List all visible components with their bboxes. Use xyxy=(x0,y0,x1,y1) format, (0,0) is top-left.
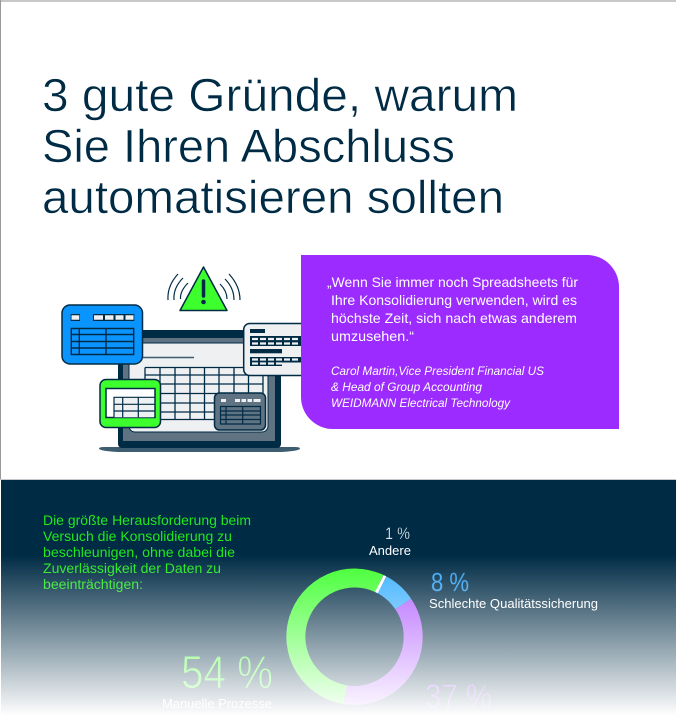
title: 3 gute Gründe, warum xyxy=(42,69,518,121)
panel: quote xyxy=(301,255,619,429)
illustration: laptop with spreadsheets and warning xyxy=(62,267,314,452)
survey question xyxy=(43,513,251,592)
title: Sie Ihren Abschluss xyxy=(42,120,455,172)
quote attribution: Carol Martin,Vice President Financial US xyxy=(331,364,544,378)
laptop screen xyxy=(123,338,275,441)
card: green table xyxy=(100,380,160,428)
survey question: beschleunigen, ohne dabei die xyxy=(43,545,235,560)
survey question: Die größte Herausforderung beim xyxy=(43,513,251,528)
title xyxy=(42,69,518,223)
label: other 1%: 1 % xyxy=(385,524,410,543)
label: poor quality assurance 8% xyxy=(429,567,598,611)
survey question: beeinträchtigen: xyxy=(43,577,143,592)
card: light table xyxy=(244,324,314,376)
icon: warning triangle xyxy=(168,267,240,310)
laptop body xyxy=(118,330,281,448)
quote text: „Wenn Sie immer noch Spreadsheets für xyxy=(327,274,578,290)
label: other 1% xyxy=(369,524,411,558)
label: other 1%: Andere xyxy=(369,543,411,558)
spreadsheet grid xyxy=(145,368,263,420)
label: poor quality assurance 8%: 8 % xyxy=(431,567,469,597)
quote text: umzusehen.“ xyxy=(331,328,414,344)
label: manual processes 54%: 54 % xyxy=(181,646,273,698)
survey question: Versuch die Konsolidierung zu xyxy=(43,529,232,544)
label: 37%: 37 % xyxy=(425,678,492,716)
card: dark grey table xyxy=(214,393,266,430)
quote attribution xyxy=(331,364,544,410)
quote text xyxy=(327,274,578,344)
title: automatisieren sollten xyxy=(42,171,504,223)
label: manual processes 54%: Manuelle Prozesse xyxy=(162,696,272,711)
label: poor quality assurance 8%: Schlechte Qualitätssicherung xyxy=(429,596,598,611)
label: manual processes 54% xyxy=(162,646,273,711)
panel: dark survey section xyxy=(1,480,676,720)
quote text: Ihre Konsolidierung verwenden, wird es xyxy=(331,292,577,308)
laptop base xyxy=(99,447,300,452)
survey question: Zuverlässigkeit der Daten zu xyxy=(43,561,221,576)
card: blue table xyxy=(62,305,142,364)
quote attribution: WEIDMANN Electrical Technology xyxy=(331,396,511,410)
donut chart xyxy=(296,578,413,695)
quote attribution: & Head of Group Accounting xyxy=(331,380,482,394)
quote text: höchste Zeit, sich nach etwas anderem xyxy=(331,310,577,326)
